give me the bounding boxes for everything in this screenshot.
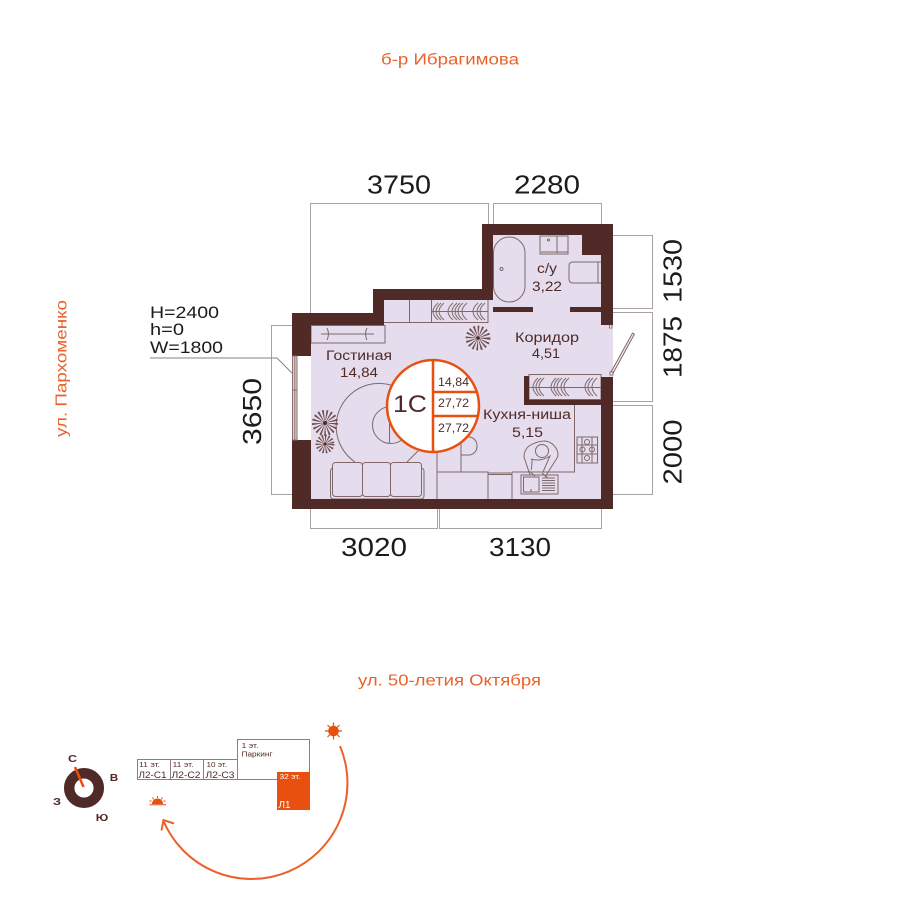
dimension values: 1875 [658,316,688,378]
site plan: 10 эт. [206,760,227,769]
kitchen sink [521,475,558,494]
total area: 27,72 [438,398,469,410]
dimension values: 2000 [658,420,688,484]
room area: kitchen: 5,15 [512,425,543,440]
room label: living room: Гостиная [326,348,392,363]
arrow: sun path [162,746,347,879]
plant: left large [318,416,332,430]
street label: west: ул. Пархоменко [54,300,70,437]
icon: setting sun [150,796,166,805]
compass: Ю [96,812,108,824]
dimension values: 3130 [489,532,551,562]
door [610,325,634,375]
round rug [336,383,418,462]
compass: В [110,772,119,784]
total area with balcony: 27,72 [438,423,469,435]
window callout line [150,358,294,375]
site plan: Паркинг [242,750,273,758]
room label: kitchen: Кухня-ниша [483,407,572,422]
site plan: Л2-С2 [172,770,200,781]
apartment type: 1С [393,391,427,418]
site plan: 11 эт. [139,760,160,769]
toilet [569,262,601,283]
plant: left small [320,439,330,449]
dimension values: 1530 [658,239,688,303]
floor plan [292,224,634,509]
dimension values: 3750 [367,170,431,200]
plant: upper [472,332,484,344]
site plan: Л2-С3 [206,770,234,781]
room label: bathroom: с/у [537,261,557,276]
site plan: 1 эт. [242,741,258,750]
hob [577,437,598,463]
clothes rail [311,326,385,343]
street label: north: б-р Ибрагимова [381,52,519,68]
room area: corridor: 4,51 [532,346,560,361]
furniture outlines [311,236,601,499]
floor [311,235,613,499]
site plan [138,740,310,811]
chair [437,437,477,472]
window parameters: H=2400 [150,304,219,322]
window [292,356,297,440]
site plan: 11 эт. [172,760,194,769]
dimension values [237,170,688,562]
kitchen counter [437,405,574,499]
dimension lines [272,204,652,528]
room area: bathroom: 3,22 [532,279,562,294]
room label: corridor: Коридор [515,330,579,345]
site plan: Л2-С1 [138,770,166,781]
room area: living room: 14,84 [340,365,379,380]
site plan: Л1 [278,799,291,811]
site plan: 32 эт. [280,772,300,781]
compass: З [53,796,62,808]
wardrobe: top [384,300,488,323]
street label: south: ул. 50-летия Октября [358,672,541,690]
kitchen wardrobe [529,374,601,400]
compass [53,753,119,824]
apartment badge [387,360,479,452]
sofa [330,462,424,499]
window parameters: h=0 [150,321,184,339]
dimension values: 3020 [341,532,407,562]
walls [292,224,613,509]
sink [540,236,568,254]
round table [372,406,410,444]
bathtub [494,237,525,302]
dimension values: 3650 [237,378,267,445]
cook [524,441,558,478]
living area: 14,84 [438,377,470,389]
dimension values: 2280 [514,170,580,200]
window parameters [150,304,223,357]
window parameters: W=1800 [150,339,223,357]
icon: sun [325,722,342,740]
compass: С [68,753,77,765]
